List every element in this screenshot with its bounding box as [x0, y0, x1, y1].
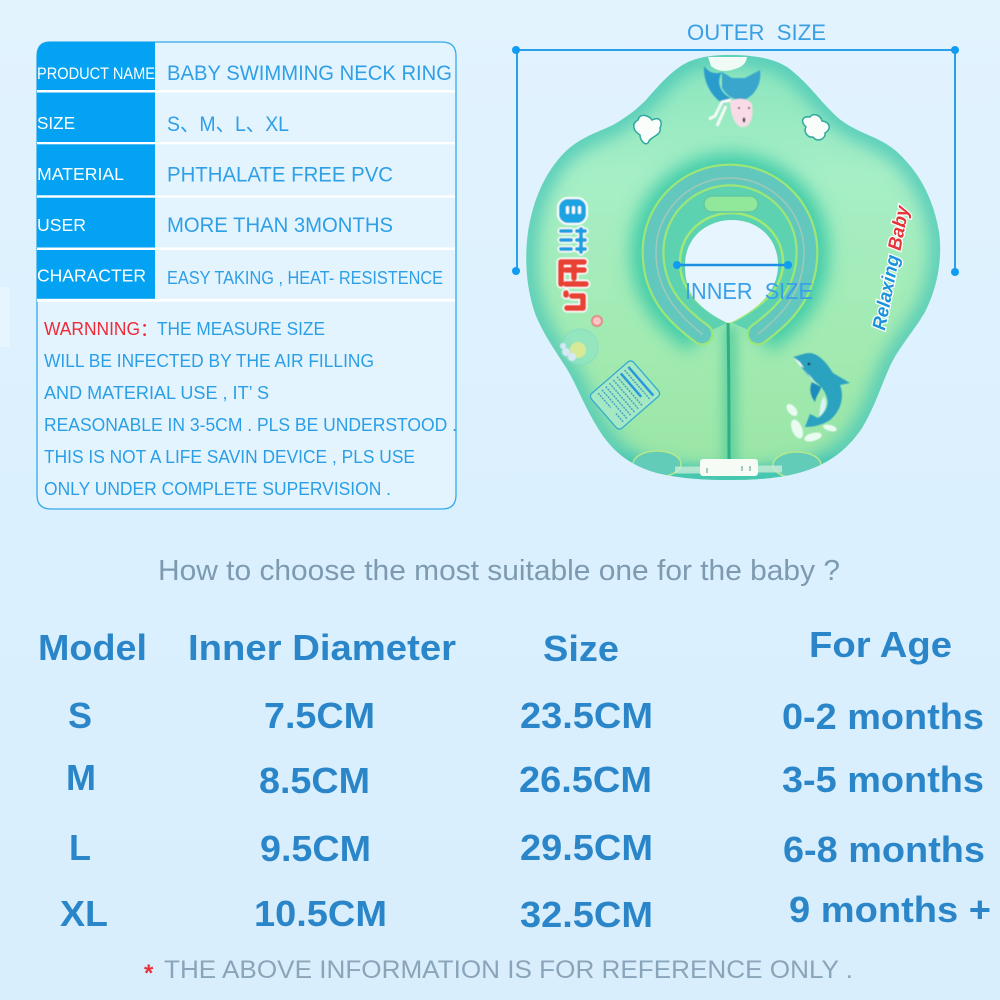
row: material: PHTHALATE FREE PVC — [167, 164, 393, 186]
ring body with soft shading — [526, 55, 940, 480]
row S: S — [68, 695, 92, 736]
row S: 7.5CM — [264, 695, 375, 736]
ring hole — [685, 220, 778, 323]
icon: right cloud — [803, 115, 829, 140]
slogan: Relaxing Baby: Relaxing Baby — [869, 203, 914, 332]
icon: baby riding dolphin — [704, 66, 760, 127]
collar handle — [704, 196, 758, 212]
warning text block: ： — [140, 319, 159, 340]
row: user: USER — [37, 215, 86, 235]
icon: left cloud — [634, 115, 661, 144]
table headers: Size — [543, 628, 619, 669]
table headers — [38, 624, 952, 669]
logo on left of ring — [558, 198, 602, 326]
row L: 6-8 months — [783, 829, 985, 870]
row S: 23.5CM — [520, 695, 653, 736]
warning text block: WARNNING — [44, 318, 140, 339]
row: character — [37, 266, 443, 288]
inner collar band — [680, 213, 783, 323]
row: material: MATERIAL — [37, 164, 124, 184]
section question heading: How to choose the most suitable one for the baby ? — [158, 555, 840, 587]
row L: L — [69, 827, 91, 868]
neck ring product illustration — [526, 55, 940, 480]
row M: 8.5CM — [259, 760, 370, 801]
outer size label: OUTER SIZE — [687, 20, 826, 45]
row: product name: BABY SWIMMING NECK RING — [167, 62, 452, 85]
row: user — [37, 214, 393, 237]
row: product name: PRODUCT NAME — [37, 65, 155, 83]
outer size dimension line — [512, 46, 959, 276]
row XL: 9 months + — [789, 889, 991, 930]
water splashes — [784, 402, 838, 443]
warning text block: AND MATERIAL USE , IT’ S — [44, 382, 269, 403]
row: material — [37, 164, 393, 186]
row: size: S、M、L、XL — [167, 113, 289, 136]
row: character: EASY TAKING , HEAT- RESISTENCE — [167, 268, 443, 288]
panel: product specification table — [37, 42, 457, 509]
row M: M — [66, 757, 96, 798]
row S: 0-2 months — [782, 696, 984, 737]
collar outer tube — [653, 175, 807, 334]
row L — [69, 827, 985, 870]
valve — [560, 329, 598, 365]
row dividers — [37, 90, 455, 302]
row L: 29.5CM — [520, 827, 653, 868]
table headers: Inner Diameter — [188, 627, 456, 668]
row: size — [37, 113, 289, 136]
collar area around hole — [653, 175, 807, 334]
size table — [38, 624, 991, 935]
row M: 26.5CM — [519, 759, 652, 800]
label column — [37, 42, 155, 299]
row XL: 32.5CM — [520, 894, 653, 935]
bottom buckle — [700, 459, 758, 476]
warning text block: THE MEASURE SIZE — [157, 318, 325, 339]
top handle and clip — [708, 57, 747, 71]
row XL: XL — [60, 893, 108, 934]
row M: 3-5 months — [782, 759, 984, 800]
row L: 9.5CM — [260, 828, 371, 869]
row S — [68, 695, 984, 737]
table headers: For Age — [809, 624, 952, 665]
row XL: 10.5CM — [254, 893, 387, 934]
icon: dolphin — [784, 353, 850, 443]
bottom suction pads — [633, 451, 821, 478]
row XL — [60, 889, 991, 935]
warning text block: REASONABLE IN 3-5CM . PLS BE UNDERSTOOD . — [44, 414, 457, 435]
warning text block: THIS IS NOT A LIFE SAVIN DEVICE , PLS USE — [44, 446, 415, 467]
table headers: Model — [38, 627, 147, 668]
row: size: SIZE — [37, 113, 75, 133]
center seam — [728, 323, 729, 462]
warning text block: ONLY UNDER COMPLETE SUPERVISION . — [44, 478, 391, 499]
inner size label: INNER SIZE — [685, 278, 813, 304]
row: user: MORE THAN 3MONTHS — [167, 214, 393, 237]
instruction label — [589, 359, 661, 431]
warning text block — [44, 318, 457, 499]
inner size dimension line — [673, 261, 792, 269]
row: character: CHARACTER — [37, 266, 146, 286]
warning text block: WILL BE INFECTED BY THE AIR FILLING — [44, 350, 374, 371]
row: product name — [37, 62, 452, 85]
footnote: THE ABOVE INFORMATION IS FOR REFERENCE ONLY . — [164, 956, 853, 984]
footnote: * — [144, 960, 154, 987]
row M — [66, 757, 984, 801]
faint light patch at left edge — [0, 287, 10, 347]
